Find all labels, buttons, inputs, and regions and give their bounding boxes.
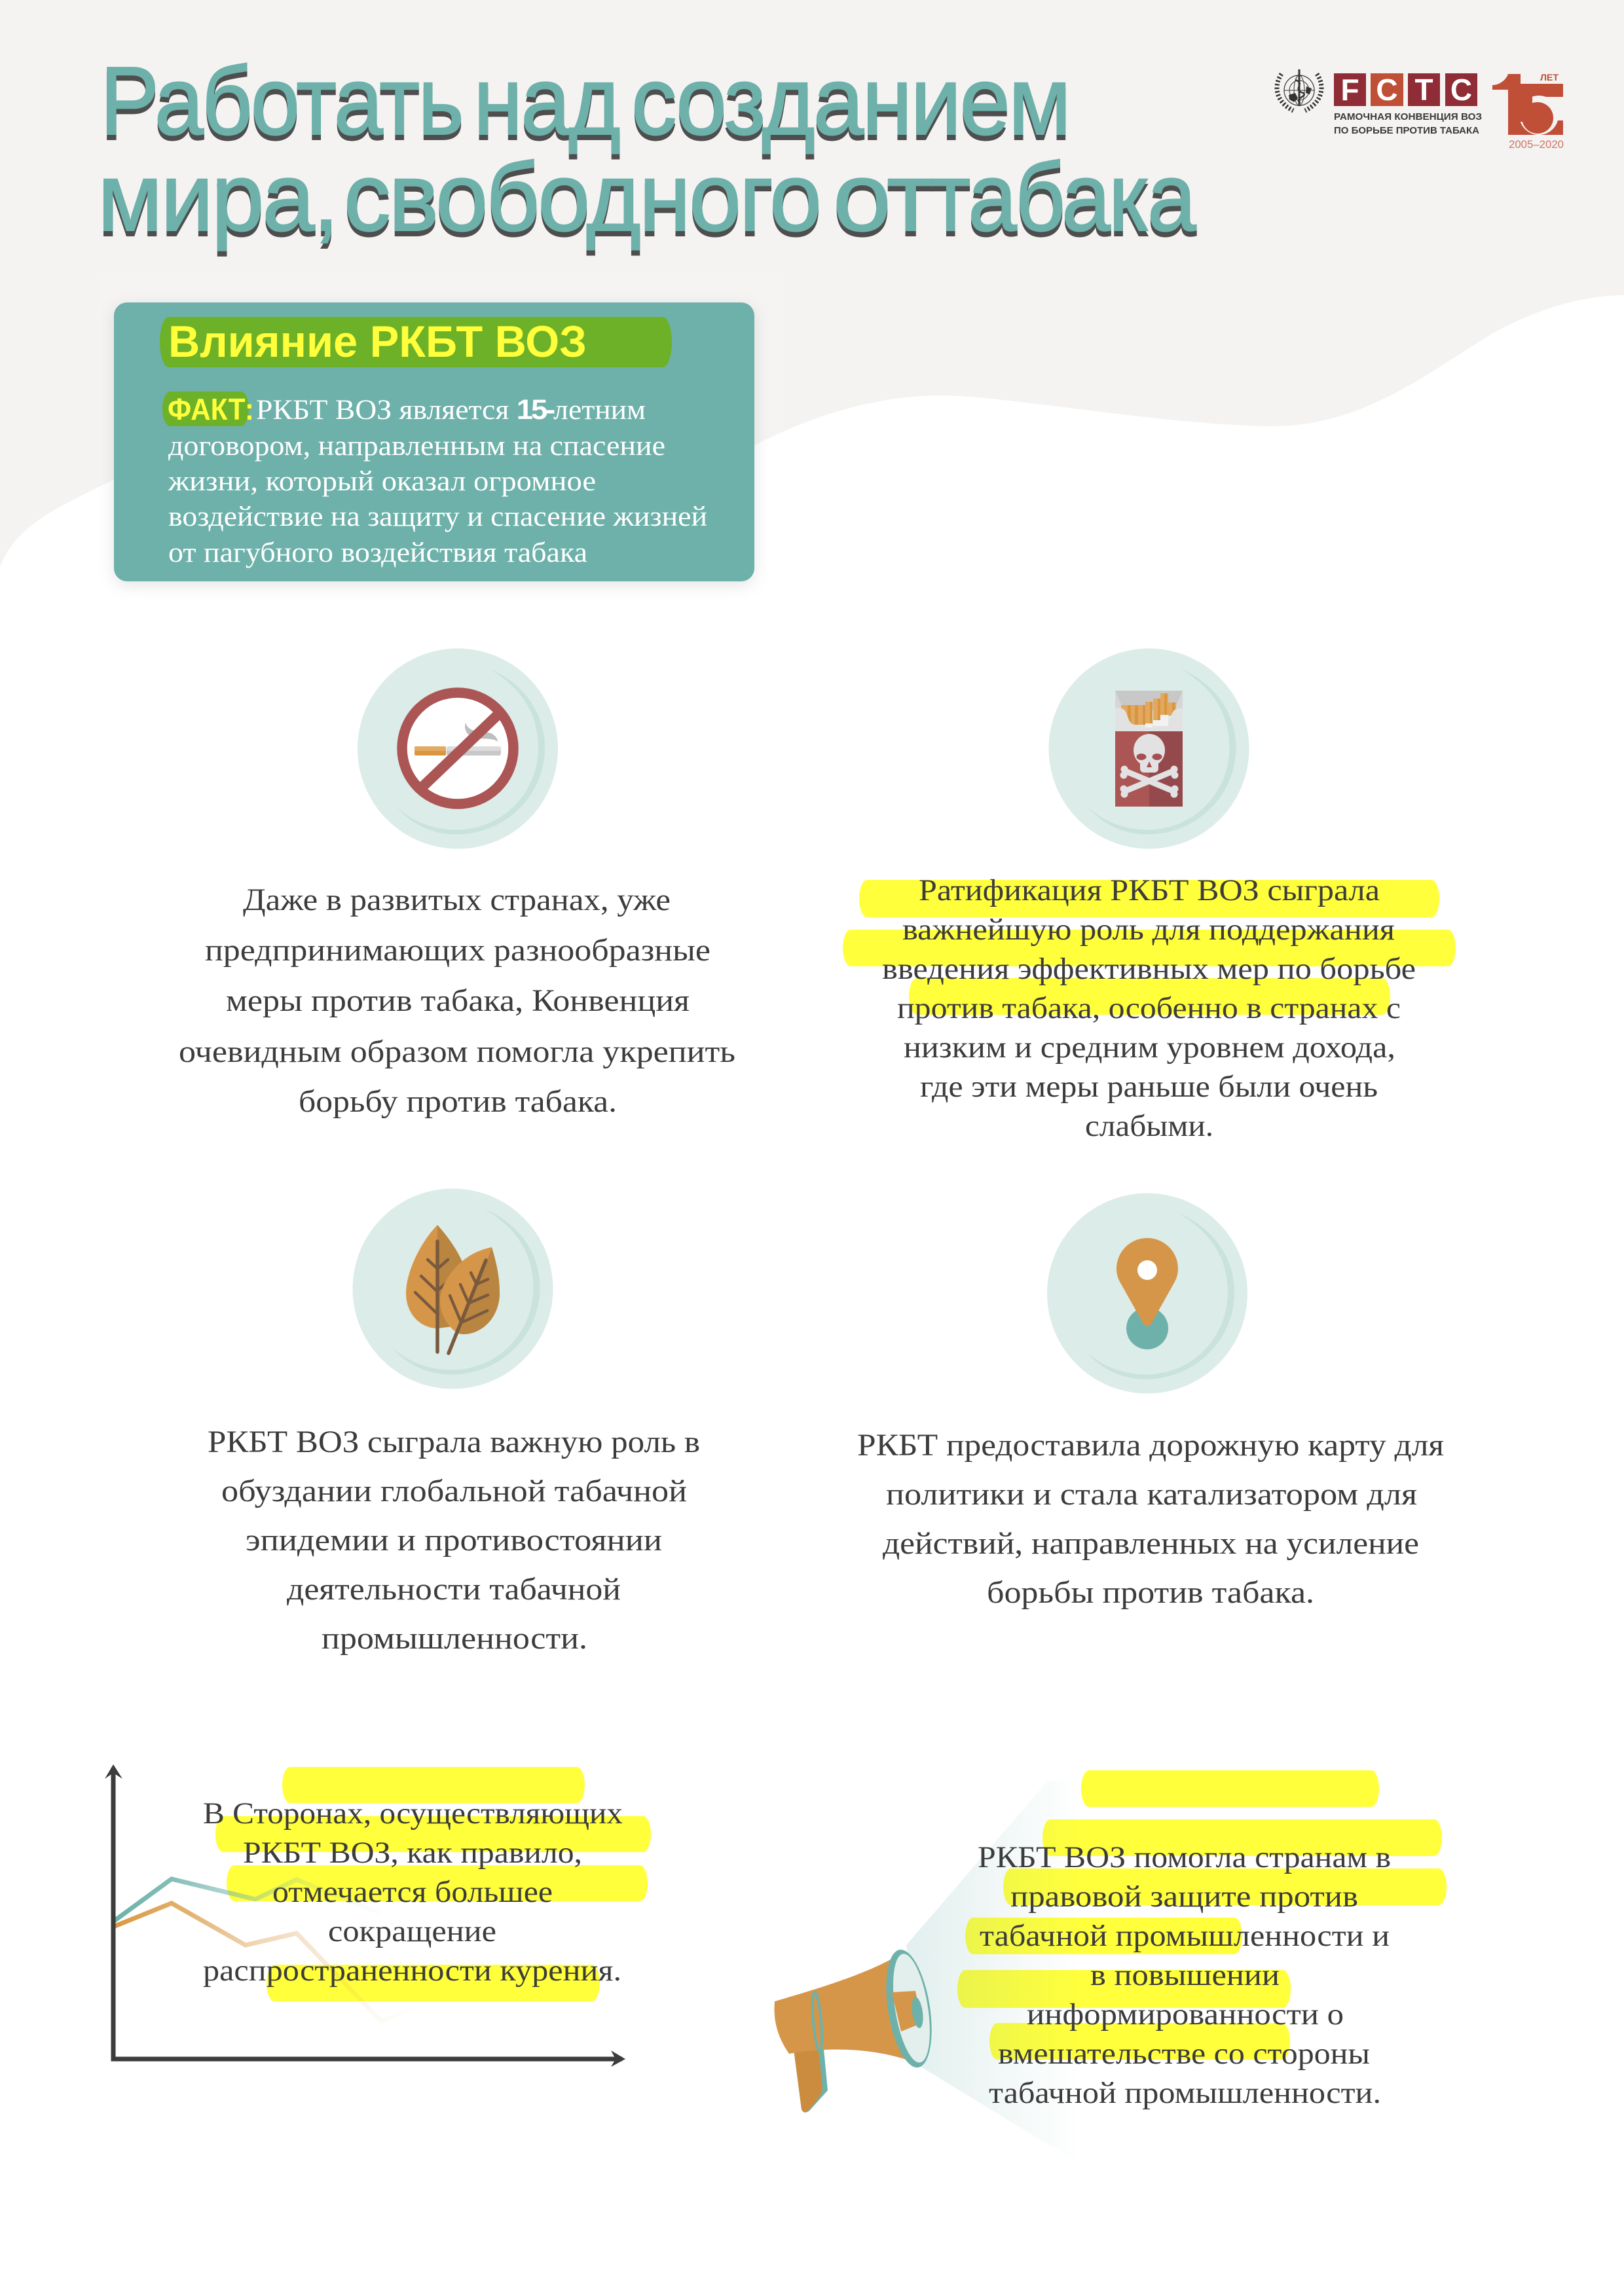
- icon: map pin: [1047, 1193, 1247, 1393]
- text: legal defence: вмешательстве со стороны: [998, 2037, 1370, 2071]
- text: ratification with highlights: слабыми.: [1085, 1109, 1213, 1143]
- title: Работать: [100, 47, 462, 155]
- panel heading: Влияние РКБТ ВОЗ: [168, 317, 587, 367]
- text: developed countries: борьбу против табака.: [299, 1084, 617, 1119]
- text: global tobacco epidemic: деятельности табачной: [287, 1572, 621, 1607]
- text: developed countries: Даже в развитых странах, уже: [243, 883, 671, 917]
- text: developed countries: очевидным образом помогла укрепить: [179, 1034, 735, 1069]
- text: legal defence: табачной промышленности и: [980, 1919, 1390, 1953]
- title: от: [833, 143, 933, 251]
- highlights: megaphone block: [957, 1770, 1447, 2060]
- fact text: жизни, который оказал огромное: [168, 466, 596, 497]
- text: legal defence: в повышении: [1090, 1958, 1280, 1992]
- icon: no smoking: [358, 648, 558, 848]
- icon: megaphone: [774, 1946, 939, 2113]
- logo: FCTC wordmark: T: [1414, 73, 1433, 107]
- text: legal defence: табачной промышленности.: [989, 2076, 1381, 2110]
- text: developed countries: [179, 883, 735, 1119]
- text: ratification with highlights: [843, 873, 1456, 1143]
- text: road map: [857, 1428, 1444, 1610]
- logo: FCTC wordmark: F: [1340, 73, 1359, 107]
- fact text: договором, направленным на спасение: [168, 431, 665, 462]
- logo: FCTC wordmark: [1334, 73, 1482, 136]
- logo: 15 years: [1492, 72, 1564, 151]
- title: [98, 47, 1196, 251]
- title: созданием: [631, 47, 1069, 155]
- background wave: [0, 0, 1624, 567]
- logo: 15 years: ЛЕТ: [1540, 72, 1559, 82]
- chart: falling prevalence lines: [105, 1764, 625, 2067]
- text: ratification with highlights: где эти меры раньше были очень: [920, 1070, 1378, 1104]
- text: developed countries: предпринимающих разнообразные: [205, 933, 710, 968]
- logo: FCTC wordmark: C: [1450, 73, 1472, 107]
- text: smoking prevalence: [203, 1796, 623, 1988]
- logo: 15 years: 2005–2020: [1509, 138, 1564, 151]
- icon: cigarette pack with skull: [1049, 648, 1249, 848]
- text: road map: борьбы против табака.: [987, 1575, 1314, 1610]
- title: мира,: [98, 143, 337, 251]
- text: developed countries: меры против табака, Конвенция: [226, 983, 690, 1018]
- text: ratification with highlights: низким и средним уровнем дохода,: [904, 1030, 1395, 1065]
- text: smoking prevalence: отмечается большее: [272, 1875, 553, 1909]
- text: global tobacco epidemic: эпидемии и противостоянии: [246, 1523, 662, 1558]
- text: smoking prevalence: распространенности курения.: [203, 1954, 621, 1988]
- text: global tobacco epidemic: обуздании глобальной табачной: [221, 1474, 687, 1508]
- text: smoking prevalence: РКБТ ВОЗ, как правило,: [243, 1836, 582, 1870]
- title: над: [473, 47, 619, 155]
- text: smoking prevalence: В Сторонах, осуществляющих: [203, 1796, 623, 1831]
- text: ratification with highlights: введения эффективных мер по борьбе: [882, 952, 1416, 986]
- text: legal defence: [978, 1840, 1391, 2110]
- text: road map: РКБТ предоставила дорожную карту для: [857, 1428, 1444, 1463]
- logo: FCTC wordmark: РАМОЧНАЯ КОНВЕНЦИЯ ВОЗ: [1334, 111, 1482, 122]
- fact text: воздействие на защиту и спасение жизней: [168, 501, 707, 532]
- text: legal defence: информированности о: [1027, 1997, 1344, 2032]
- logo: WHO emblem: [1277, 69, 1321, 111]
- sound beam: [906, 1781, 1153, 2160]
- text: legal defence: правовой защите против: [1010, 1880, 1358, 1914]
- fact text: от пагубного воздействия табака: [168, 538, 587, 568]
- fact text: [168, 394, 707, 568]
- text: global tobacco epidemic: РКБТ ВОЗ сыграла важную роль в: [208, 1425, 700, 1459]
- icon: tobacco leaves: [352, 1189, 553, 1389]
- text: legal defence: РКБТ ВОЗ помогла странам в: [978, 1840, 1391, 1874]
- title: свободного: [344, 143, 820, 251]
- text: global tobacco epidemic: промышленности.: [322, 1621, 587, 1656]
- logo: FCTC wordmark: C: [1376, 73, 1398, 107]
- logo: FCTC wordmark: ПО БОРЬБЕ ПРОТИВ ТАБАКА: [1334, 125, 1479, 136]
- text: global tobacco epidemic: [208, 1425, 700, 1656]
- fact label: ФАКТ:: [168, 392, 254, 426]
- fact text: РКБТ ВОЗ является 15-летним: [256, 394, 646, 426]
- text: road map: действий, направленных на усиление: [883, 1526, 1419, 1561]
- text: ratification with highlights: важнейшую роль для поддержания: [902, 913, 1395, 947]
- text: smoking prevalence: сокращение: [328, 1914, 496, 1948]
- title: табака: [931, 143, 1196, 251]
- text: ratification with highlights: против табака, особенно в странах с: [897, 991, 1401, 1025]
- text: ratification with highlights: Ратификация РКБТ ВОЗ сыграла: [919, 873, 1380, 907]
- text: road map: политики и стала катализатором для: [886, 1477, 1417, 1512]
- highlights: chart block: [215, 1767, 651, 2001]
- panel: FCTC impact fact: [98, 279, 783, 600]
